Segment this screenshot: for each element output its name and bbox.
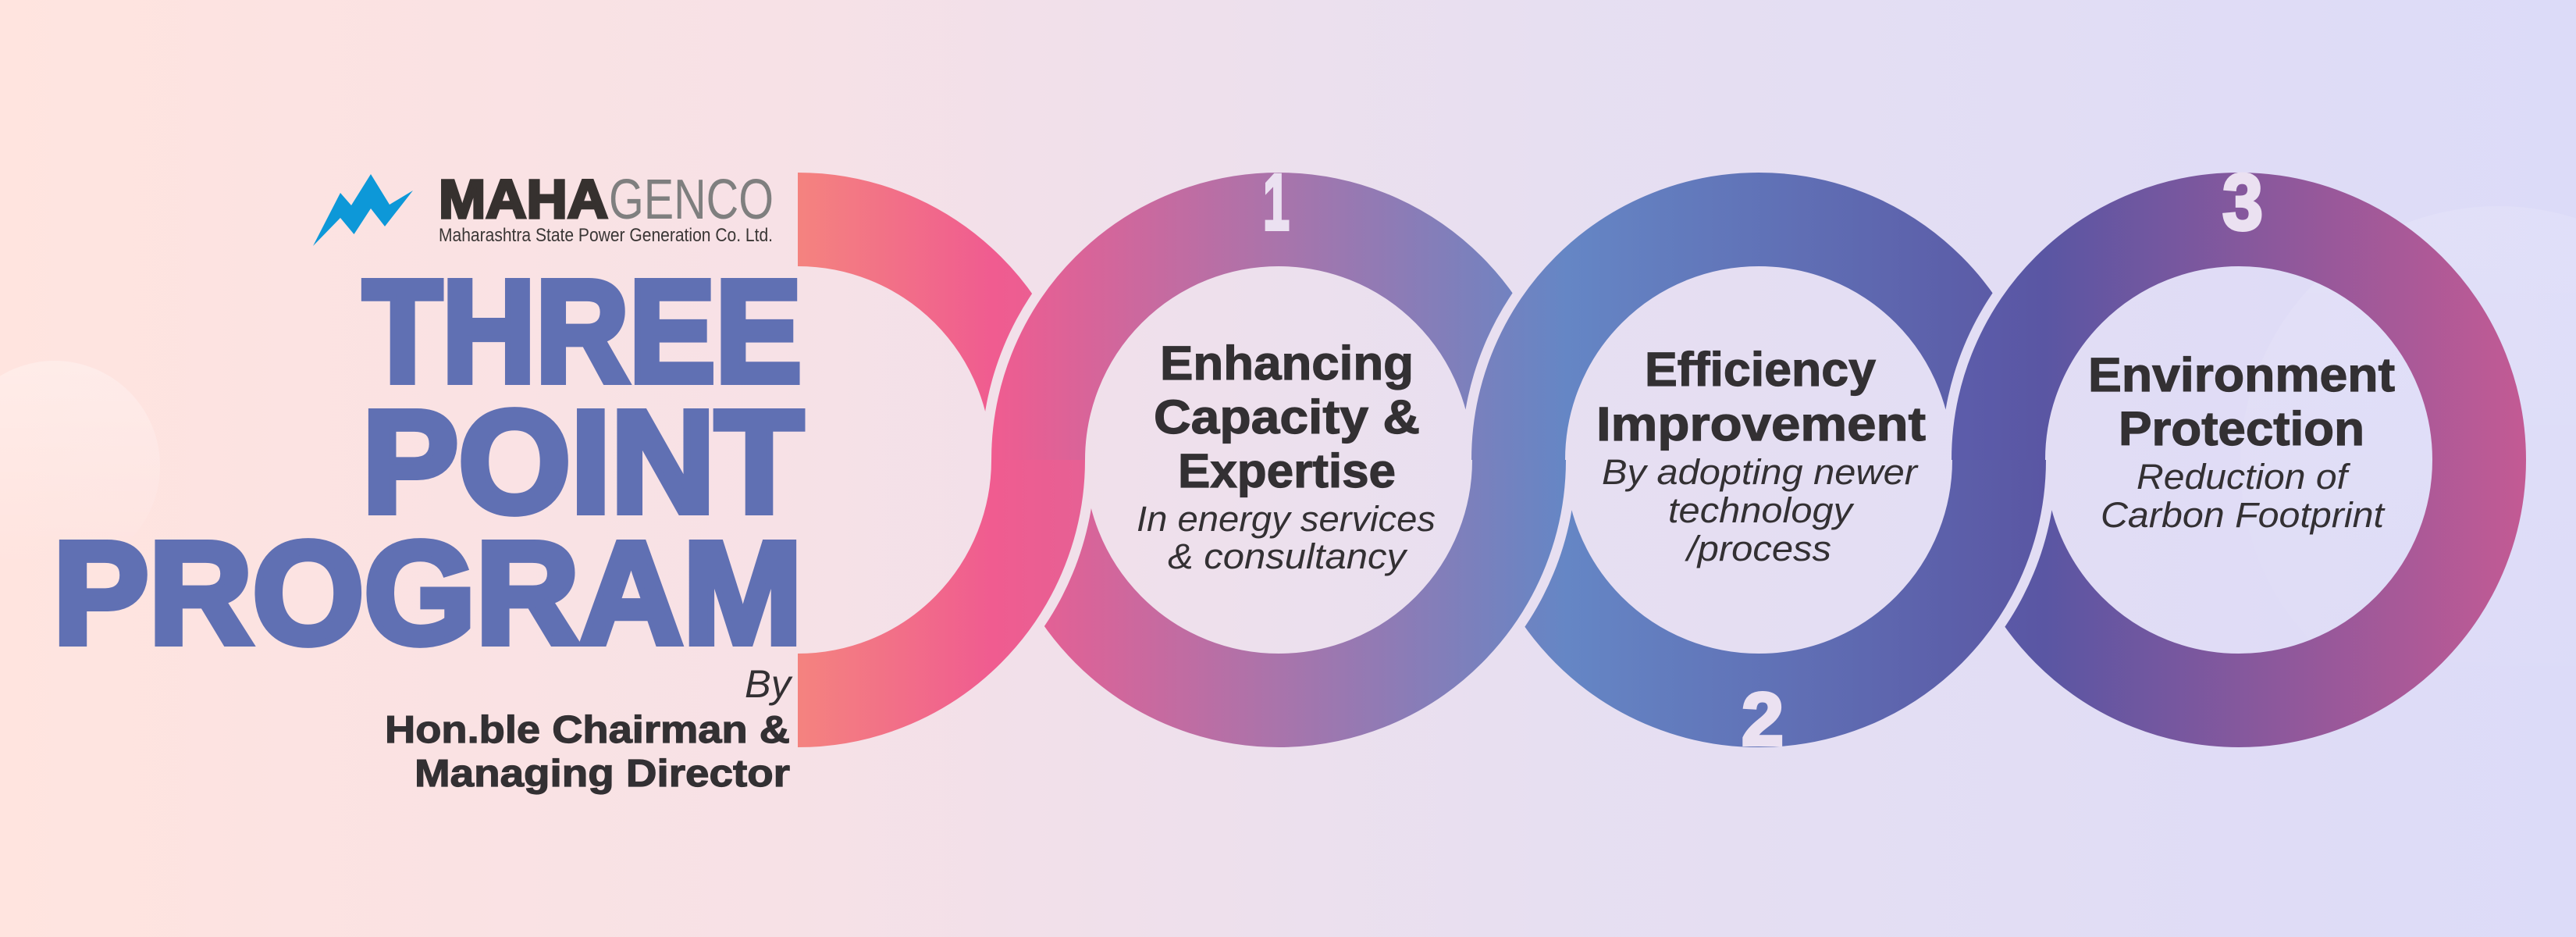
heading: Environment Protection: Environment <box>2088 348 2395 401</box>
heading: Enhancing Capacity & Expertise: Enhancing <box>1160 337 1414 390</box>
logo: MAHAGENCO <box>313 169 774 246</box>
number 3: 3 <box>2222 158 2263 247</box>
subtext: energy services: & consultancy <box>1168 536 1408 576</box>
ring: point 1 <box>1038 219 1519 700</box>
subtext: energy services: In energy services <box>1137 499 1436 539</box>
subtext: carbon footprint <box>2101 457 2386 535</box>
logo wordmark: GENCO <box>609 169 774 231</box>
title: Three Point Program: PROGRAM <box>53 512 802 675</box>
heading: Enhancing Capacity & Expertise: Capacity & <box>1154 390 1420 444</box>
point 1 text <box>1137 337 1436 576</box>
heading: Efficiency Improvement: Improvement <box>1596 397 1926 451</box>
title: Three Point Program <box>53 251 803 675</box>
icon: blue lightning peaks <box>313 174 413 246</box>
number 2: 2 <box>1742 678 1784 761</box>
logo tagline: Maharashtra State Power Generation Co. Ltd. <box>439 225 773 246</box>
interlocking ring chain <box>557 219 2479 700</box>
heading: Environment Protection <box>2088 348 2395 455</box>
byline: Hon.ble Chairman & <box>385 709 790 751</box>
subtext: carbon footprint: Reduction of <box>2137 457 2351 497</box>
ring: point 2 <box>1518 219 1999 700</box>
subtext: adopting technology <box>1602 452 1919 568</box>
heading: Efficiency Improvement <box>1596 343 1926 451</box>
heading: Environment Protection: Protection <box>2119 402 2364 455</box>
byline: Managing Director <box>415 753 790 795</box>
number 1: 1 <box>1263 158 1290 247</box>
subtext: adopting technology: By adopting newer <box>1602 452 1919 492</box>
ring: opening half ring <box>798 173 1085 747</box>
subtext: carbon footprint: Carbon Footprint <box>2101 495 2386 535</box>
subtext: adopting technology: technology <box>1668 490 1855 530</box>
byline: By <box>745 662 793 706</box>
title: Three Point Program: POINT <box>362 381 803 543</box>
heading: Enhancing Capacity & Expertise: Expertise <box>1178 444 1396 497</box>
heading: Efficiency Improvement: Efficiency <box>1645 343 1876 396</box>
logo wordmark <box>439 169 774 231</box>
subtext: adopting technology: /process <box>1685 529 1831 568</box>
point 2 text <box>1596 343 1926 568</box>
subtext: energy services <box>1137 499 1436 576</box>
byline <box>385 662 793 795</box>
heading: Enhancing Capacity & Expertise <box>1154 337 1420 497</box>
logo wordmark: MAHA <box>439 169 608 230</box>
title: Three Point Program: THREE <box>363 251 802 412</box>
ring: point 3 <box>1998 219 2479 700</box>
point 3 text <box>2088 348 2395 535</box>
